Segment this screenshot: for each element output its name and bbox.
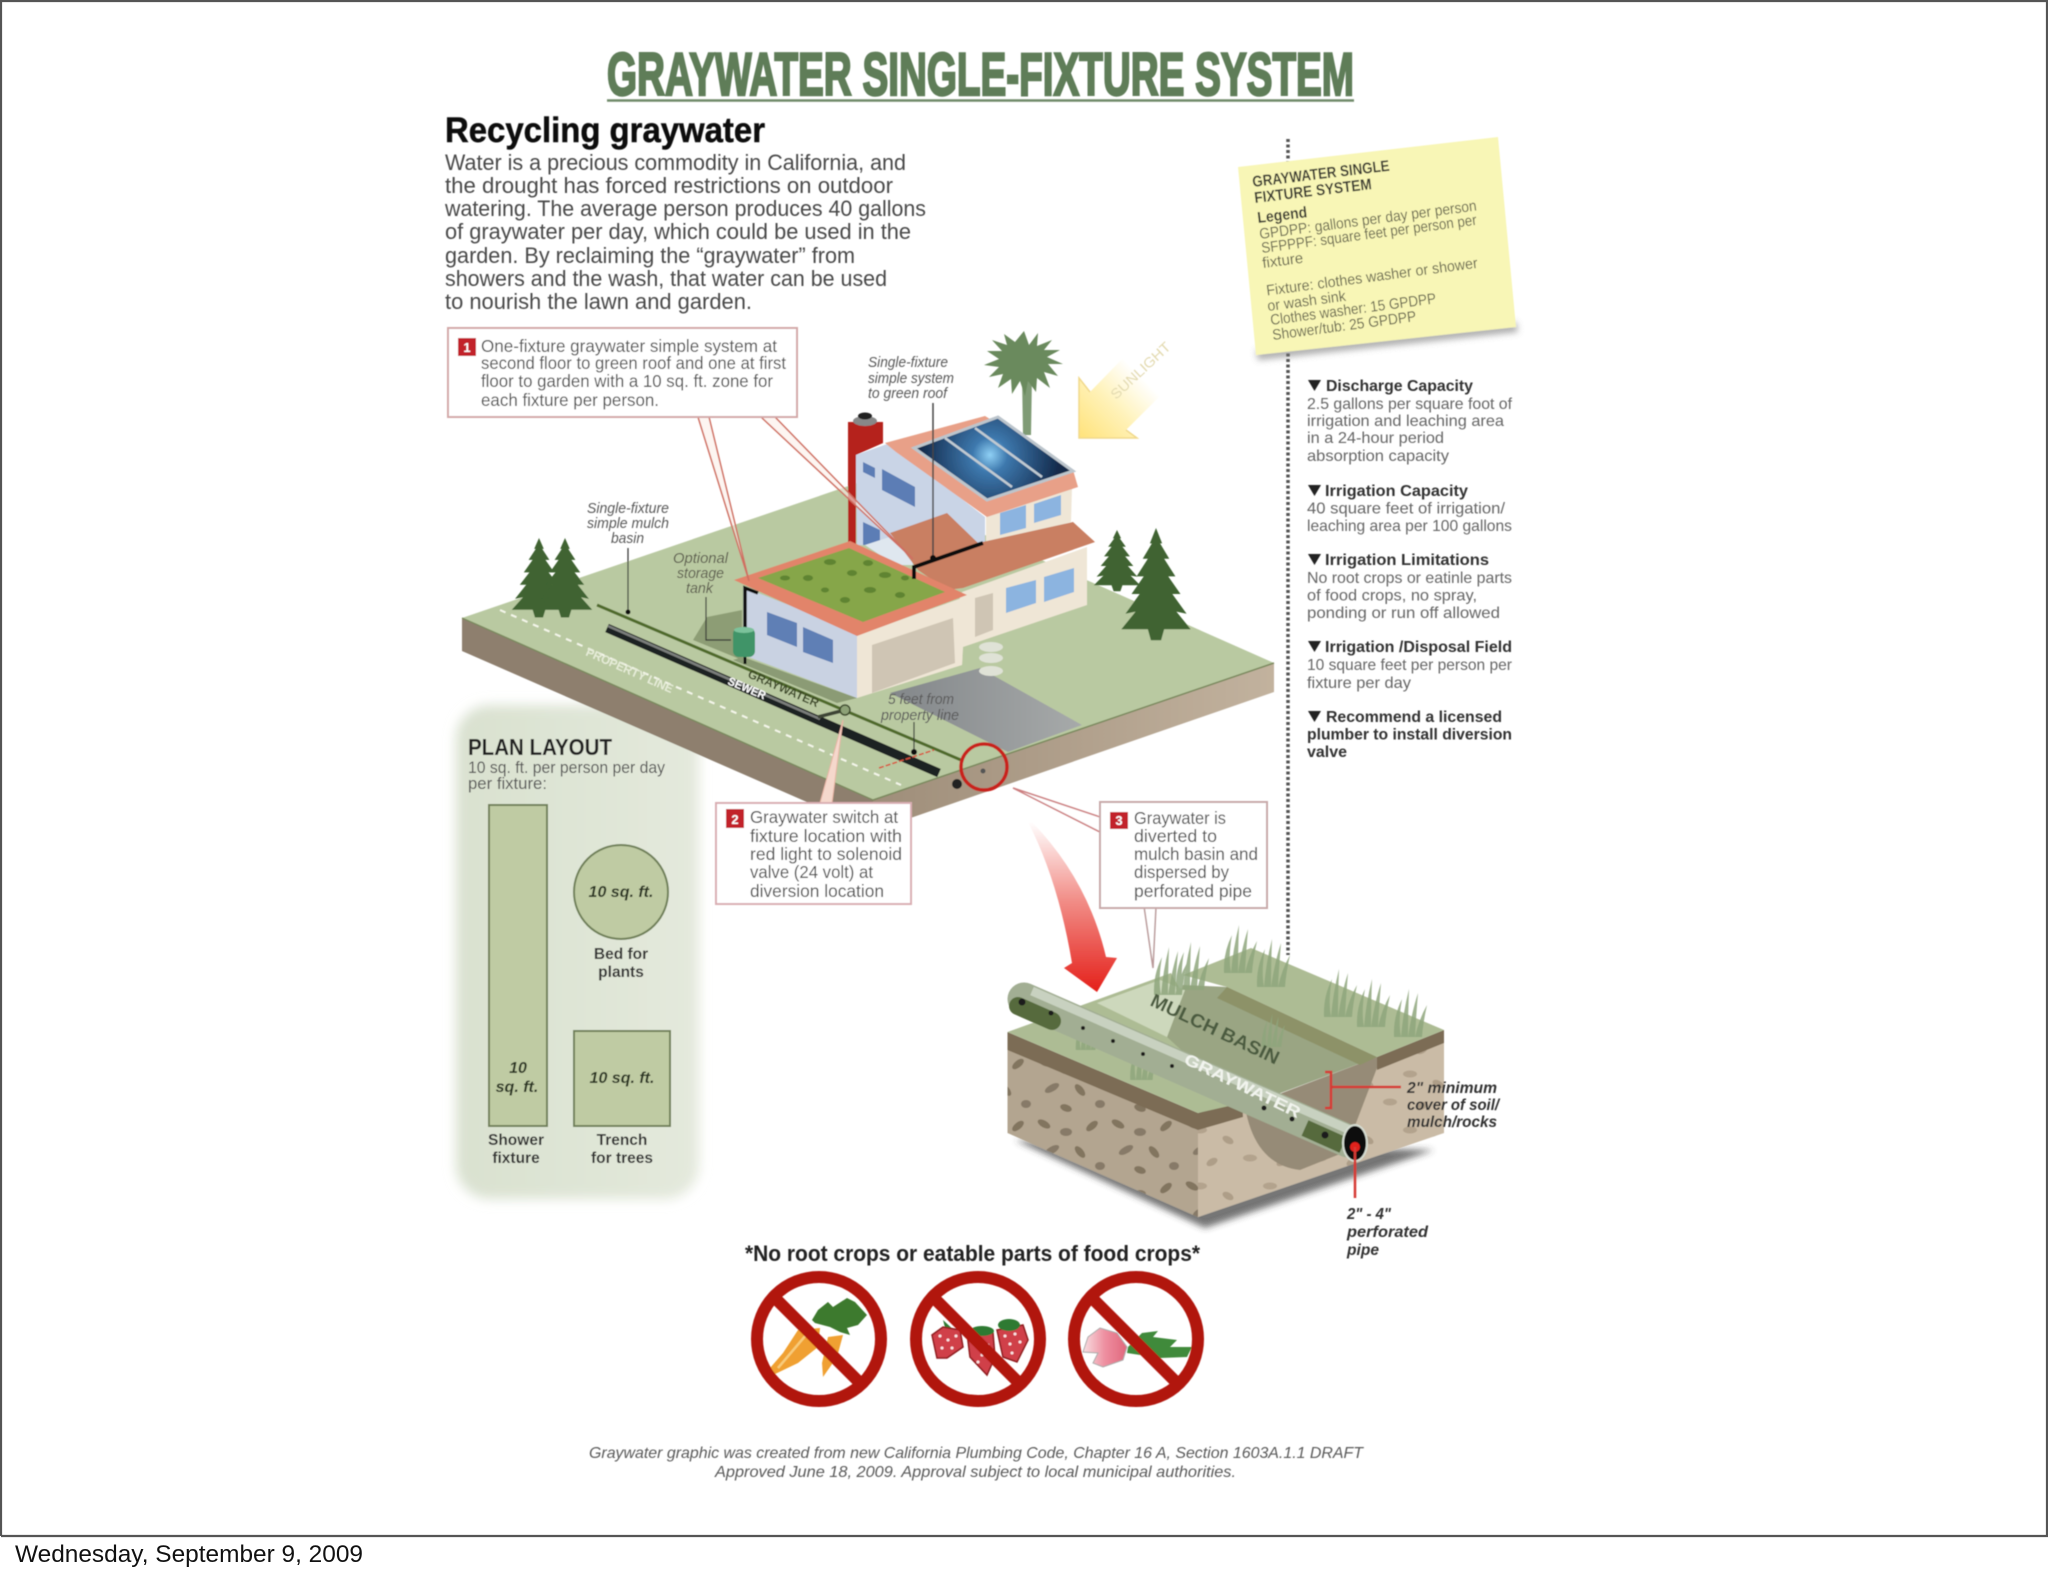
cover note	[1406, 1080, 1501, 1131]
intro text block: of graywater per day, which could be used in the	[445, 219, 911, 244]
callout 1 leader lines	[698, 417, 913, 581]
callout 2: diversion location	[750, 881, 884, 901]
intro text block: to nourish the lawn and garden.	[445, 289, 752, 314]
trench floor	[1167, 985, 1377, 1107]
shower fixture shape: fixture	[492, 1150, 540, 1167]
callout 2 leader wedge	[820, 720, 843, 803]
sticky note legend: or wash sink	[1266, 288, 1347, 315]
irrigation limitations	[1307, 552, 1512, 622]
shower fixture shape	[488, 805, 547, 1167]
irrigation capacity: Irrigation Capacity	[1325, 483, 1468, 500]
sticky note legend: SFPPPF: square feet per person per	[1260, 212, 1478, 257]
lower roof	[890, 513, 1095, 590]
icon: no strawberries	[916, 1277, 1040, 1401]
cover note: 2" minimum	[1406, 1080, 1497, 1097]
icon: no radish	[1074, 1277, 1198, 1401]
green mulch line	[597, 605, 961, 760]
irrigation disposal field: 10 square feet per person per	[1307, 657, 1513, 674]
tree pair left	[512, 538, 592, 618]
icon: no carrots	[757, 1277, 881, 1401]
trench for trees shape: for trees	[591, 1150, 653, 1167]
ground labels: GRAYWATER	[746, 667, 821, 710]
plumber recommendation	[1307, 709, 1512, 761]
irrigation disposal field: fixture per day	[1307, 675, 1411, 692]
shower fixture shape: Shower	[488, 1132, 544, 1149]
dotted divider	[1286, 139, 1290, 955]
sticky note legend: Clothes washer: 15 GPDPP	[1269, 290, 1437, 329]
pipes on house	[745, 403, 983, 664]
trench section	[1245, 1057, 1377, 1170]
sticky note legend: GPDPP: gallons per day per person	[1258, 198, 1478, 243]
driveway	[890, 668, 1082, 752]
sticky note legend	[1238, 137, 1518, 360]
heading: recycling graywater: Recycling graywater	[445, 111, 765, 150]
trench for trees shape	[574, 1031, 670, 1167]
plan layout subtitle	[468, 759, 666, 793]
sticky note legend: Fixture: clothes washer or shower	[1265, 255, 1479, 299]
label: storage tank: Optional	[673, 550, 729, 567]
trench for trees shape: Trench	[597, 1132, 647, 1149]
plumber recommendation: valve	[1307, 744, 1347, 761]
solar panels	[914, 417, 1073, 500]
grass tufts	[1076, 925, 1427, 1080]
cover depth bracket	[1325, 1072, 1401, 1198]
badge 2: 2	[731, 812, 739, 827]
intro text block: the drought has forced restrictions on outdoor	[445, 173, 893, 198]
discharge capacity: absorption capacity	[1307, 448, 1449, 465]
upper storey gable wall	[856, 443, 985, 548]
sticky note legend: Legend	[1256, 204, 1308, 227]
callout 2: Graywater switch at	[750, 807, 898, 827]
label: storage tank: tank	[686, 580, 714, 597]
grass surfaces	[1008, 948, 1444, 1113]
intro text block: showers and the wash, that water can be used	[445, 266, 887, 291]
block shadow	[1015, 1140, 1434, 1228]
house site isometric illustration	[462, 331, 1274, 831]
discharge capacity: Discharge Capacity	[1326, 378, 1473, 395]
callout 1: One-fixture graywater simple system at	[481, 336, 777, 356]
irrigation disposal field: Irrigation /Disposal Field	[1325, 639, 1512, 656]
discharge capacity: 2.5 gallons per square foot of	[1307, 396, 1513, 413]
callout 3 leaders	[1013, 788, 1100, 832]
source credit: Graywater graphic was created from new California Plumbing Code, Chapter 16 A, Section 1603A.1.1 DRAFT	[589, 1445, 1364, 1462]
intro text block: garden. By reclaiming the “graywater” from	[445, 243, 855, 268]
label: mulch basin: Single-fixture	[587, 500, 669, 517]
label: mulch basin	[587, 500, 669, 614]
badge 3: 3	[1115, 813, 1123, 828]
tree pair right	[1094, 528, 1191, 640]
pipe opening	[1342, 1124, 1368, 1162]
plumber recommendation: Recommend a licensed	[1326, 709, 1502, 726]
callout 3: dispersed by	[1134, 862, 1229, 882]
lower cream wall	[945, 547, 1087, 665]
callout 3: diverted to	[1134, 826, 1217, 846]
badge 1	[458, 338, 476, 356]
irrigation capacity: 40 square feet of irrigation/	[1307, 500, 1506, 518]
shadow along house wall	[733, 657, 857, 703]
sticky note legend: GRAYWATER SINGLE	[1251, 158, 1391, 191]
annex left wall	[743, 587, 857, 698]
red curved arrow	[1028, 822, 1117, 992]
perforated pipe	[1018, 991, 1368, 1162]
callout 3	[1013, 788, 1267, 968]
chimney	[848, 412, 883, 545]
trench back wall	[1217, 987, 1377, 1065]
bed for plants shape: plants	[598, 964, 644, 981]
label: setback: 5 feet from	[888, 691, 954, 708]
label: setback	[880, 691, 959, 724]
callout 1: floor to garden with a 10 sq. ft. zone for	[481, 371, 773, 391]
pipe size note: perforated	[1346, 1224, 1429, 1241]
irrigation limitations: of food crops, no spray,	[1307, 588, 1477, 604]
ground labels: SEWER	[726, 676, 768, 703]
badge 1: 1	[463, 340, 471, 355]
callout 2	[716, 720, 911, 904]
property line dashes	[500, 610, 901, 785]
mulch basin label: MULCH BASIN	[1147, 991, 1282, 1069]
plan layout subtitle: per fixture:	[468, 775, 547, 793]
palm tree	[984, 331, 1063, 435]
bed for plants shape	[574, 845, 668, 981]
green roof	[734, 541, 967, 636]
irrigation limitations: ponding or run off allowed	[1307, 605, 1500, 622]
trench for trees shape: 10 sq. ft.	[590, 1070, 654, 1087]
badge 2	[726, 809, 744, 828]
highlighted wedge	[1097, 980, 1185, 1037]
garage face	[857, 597, 965, 698]
label: green roof system	[868, 354, 954, 402]
graywater pipe label: GRAYWATER	[1181, 1051, 1304, 1122]
discharge capacity: in a 24-hour period	[1307, 430, 1444, 447]
irrigation limitations: No root crops or eatinle parts	[1307, 570, 1512, 587]
red dimension marker	[879, 722, 934, 768]
sticky note legend: FIXTURE SYSTEM	[1253, 176, 1373, 207]
mulch basin cutaway	[1008, 925, 1501, 1259]
callout 2: valve (24 volt) at	[750, 862, 873, 882]
cover note: cover of soil/	[1407, 1097, 1501, 1114]
label: storage tank: storage	[677, 565, 724, 582]
cover note: mulch/rocks	[1407, 1114, 1497, 1131]
label: mulch basin: simple mulch	[587, 515, 669, 532]
ground plate	[462, 481, 1274, 831]
pipe size note	[1346, 1206, 1429, 1259]
ground labels	[584, 645, 821, 710]
shower fixture shape: sq. ft.	[496, 1079, 538, 1096]
sunlight arrow: SUNLIGHT	[1107, 338, 1174, 402]
intro text block	[444, 150, 926, 314]
source credit: Approved June 18, 2009. Approval subject to local municipal authorities.	[714, 1464, 1236, 1481]
house	[733, 403, 1095, 698]
callout 3 tail	[1144, 906, 1156, 968]
pipe size note: 2" - 4"	[1346, 1206, 1392, 1223]
badge 3	[1110, 812, 1128, 829]
irrigation capacity: leaching area per 100 gallons	[1307, 518, 1512, 535]
label: green roof system: to green roof	[868, 385, 949, 402]
soil faces	[1008, 1040, 1444, 1217]
discharge capacity: irrigation and leaching area	[1307, 413, 1504, 430]
callout 3: perforated pipe	[1134, 881, 1252, 901]
label: mulch basin: basin	[611, 530, 644, 547]
shower fixture shape: 10	[509, 1060, 527, 1077]
sunlight arrow	[1079, 338, 1174, 438]
plumber recommendation: plumber to install diversion	[1307, 726, 1512, 744]
right column: requirements list	[1307, 378, 1513, 761]
intro text block: watering. The average person produces 40 gallons	[444, 196, 926, 221]
callout 1	[448, 328, 913, 581]
callout 3: Graywater is	[1134, 808, 1226, 828]
irrigation disposal field	[1307, 639, 1513, 692]
callout 1: each fixture per person.	[481, 390, 659, 410]
diversion valve marker	[961, 744, 1007, 790]
crop warning heading: *No root crops or eatable parts of food crops*	[745, 1241, 1200, 1266]
diversion valve icon	[952, 779, 962, 789]
panel: plan layout	[456, 705, 699, 1199]
sticky note legend: Shower/tub: 25 GPDPP	[1271, 308, 1417, 344]
topsoil strips	[1008, 1030, 1444, 1130]
label: setback: property line	[880, 707, 959, 724]
irrigation limitations: Irrigation Limitations	[1325, 552, 1489, 569]
plan layout subtitle: 10 sq. ft. per person per day	[468, 759, 666, 777]
date footer: Wednesday, September 9, 2009	[15, 1541, 363, 1568]
pipe size note: pipe	[1346, 1242, 1379, 1259]
sticky note legend: fixture	[1261, 250, 1304, 272]
label: green roof system: Single-fixture	[868, 354, 948, 371]
bed for plants shape: 10 sq. ft.	[589, 884, 653, 901]
ground labels: PROPERTY LINE	[584, 645, 675, 696]
label: storage tank	[673, 550, 731, 640]
storage tank	[733, 627, 755, 657]
callout 1: second floor to green roof and one at first	[481, 353, 786, 373]
label: green roof system: simple system	[868, 370, 954, 387]
intro text block: Water is a precious commodity in California, and	[445, 150, 906, 175]
title: GRAYWATER SINGLE-FIXTURE SYSTEM	[607, 41, 1354, 108]
upper storey cream wall	[986, 487, 1072, 548]
callout 3: mulch basin and	[1134, 844, 1258, 864]
branch and valve	[818, 705, 850, 717]
plan layout heading: PLAN LAYOUT	[468, 734, 612, 760]
sewer pipe	[607, 626, 939, 773]
irrigation capacity	[1307, 483, 1512, 535]
glass porch	[865, 532, 913, 565]
callout 2: red light to solenoid	[750, 844, 902, 864]
discharge capacity	[1307, 378, 1513, 465]
storage tank shadow	[693, 610, 742, 660]
stepping stones	[979, 642, 1003, 676]
source credit	[589, 1445, 1364, 1481]
bed for plants shape: Bed for	[594, 946, 648, 963]
upper roof	[885, 416, 1078, 517]
callout 2: fixture location with	[750, 826, 902, 846]
